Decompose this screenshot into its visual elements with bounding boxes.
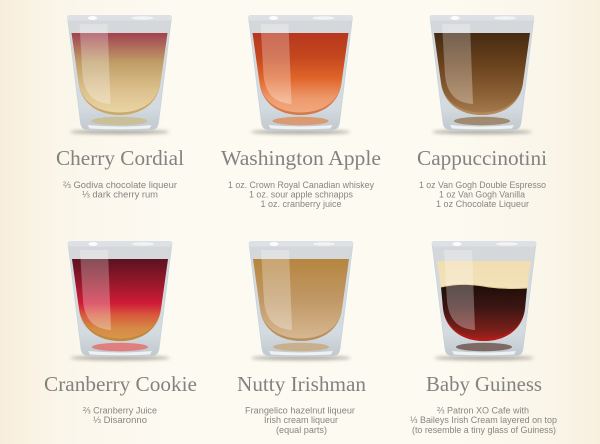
recipe: Cappuccinotini: 1 oz Chocolate Liqueur — [436, 199, 529, 209]
title: Cranberry Cookie: Cranberry Cookie — [44, 372, 197, 396]
recipe: Cappuccinotini — [419, 180, 546, 209]
recipe: Cherry Cordial — [63, 180, 177, 200]
glass: Cappuccinotini — [430, 15, 534, 134]
title: Nutty Irishman: Nutty Irishman — [237, 372, 367, 396]
recipe: Baby Guiness: (to resemble a tiny glass of Guiness) — [412, 425, 556, 435]
glass: Baby Guiness — [432, 241, 536, 360]
glass: Cranberry Cookie — [68, 241, 172, 360]
recipe: Cherry Cordial: ⅔ Godiva chocolate liqueur — [63, 180, 177, 190]
title: Baby Guiness: Baby Guiness — [426, 372, 542, 396]
recipe: Nutty Irishman — [245, 406, 355, 435]
recipe: Baby Guiness — [410, 406, 557, 435]
recipe: Washington Apple: 1 oz. Crown Royal Canadian whiskey — [228, 180, 374, 190]
title: Washington Apple: Washington Apple — [221, 146, 381, 170]
recipe: Cherry Cordial: ⅓ dark cherry rum — [82, 190, 158, 200]
recipe: Washington Apple — [228, 180, 374, 209]
glass: Nutty Irishman — [249, 241, 353, 360]
title: Cherry Cordial: Cherry Cordial — [56, 146, 184, 170]
recipe: Washington Apple: 1 oz. cranberry juice — [260, 199, 342, 209]
recipe: Cappuccinotini: 1 oz Van Gogh Double Espresso — [419, 180, 546, 190]
glass: Cherry Cordial — [68, 15, 172, 134]
recipe: Baby Guiness: ⅔ Patron XO Cafe with — [437, 406, 529, 416]
recipe: Washington Apple: 1 oz. sour apple schnapps — [249, 190, 353, 200]
recipe: Nutty Irishman: (equal parts) — [276, 425, 327, 435]
recipe: Cranberry Cookie: ⅔ Cranberry Juice — [83, 406, 157, 416]
recipe: Cranberry Cookie: ⅓ Disaronno — [93, 415, 147, 425]
glass: Washington Apple — [248, 15, 352, 134]
title: Cappuccinotini: Cappuccinotini — [417, 146, 547, 170]
recipe: Nutty Irishman: Irish cream liqueur — [264, 415, 338, 425]
recipe: Nutty Irishman: Frangelico hazelnut liqueur — [245, 406, 355, 416]
recipe: Cappuccinotini: 1 oz Van Gogh Vanilla — [439, 190, 525, 200]
recipe: Baby Guiness: ⅓ Baileys Irish Cream layered on top — [410, 415, 557, 425]
recipe: Cranberry Cookie — [83, 406, 157, 425]
